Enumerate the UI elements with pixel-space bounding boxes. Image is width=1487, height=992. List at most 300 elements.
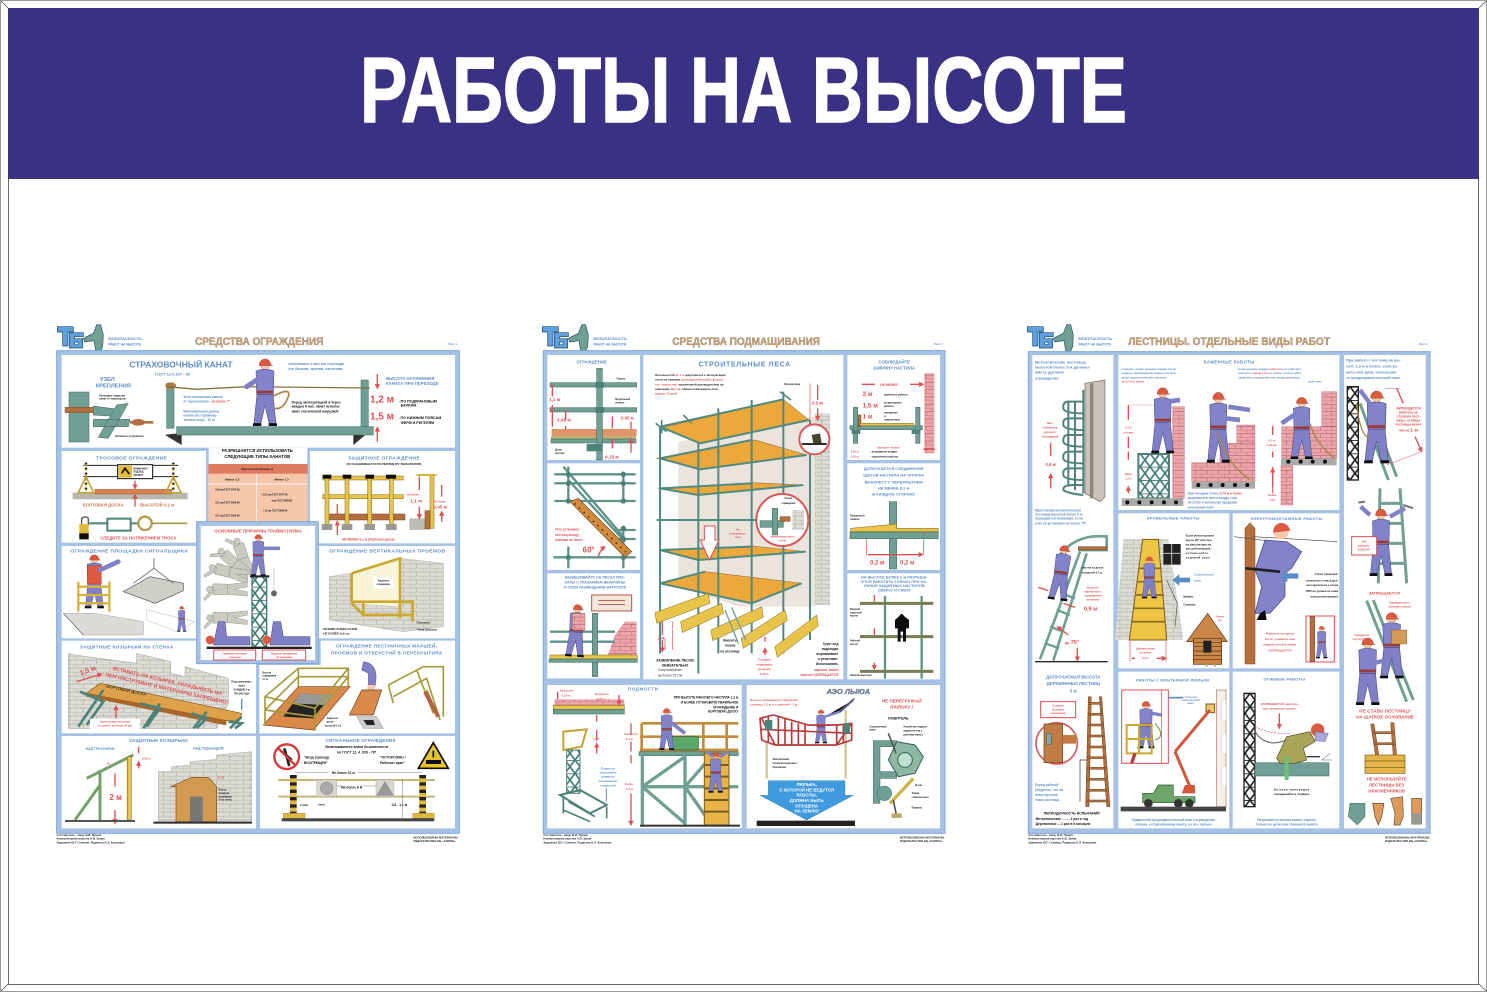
panel: огневые работы [1233,672,1339,828]
panel: ограждение вертикальных проемов: Проушины [417,622,430,624]
panel: строительные леса: не менее [758,667,771,671]
panel: тросовое ограждение: ВЫСОТОЙ 0,1 м [140,503,174,508]
panel: кровельные работы: не рассчитана на [1186,542,1211,546]
panel: страховочный канат [62,355,455,448]
panel: строительные леса: Сопротивление [658,668,682,672]
panel: кровельные работы: используйте [1186,551,1208,555]
inset circles: прикрепление лесов [770,536,795,538]
panel: лестницы левая колонка: ногах прочная [1035,793,1058,797]
wooden ladder [1086,697,1110,807]
panel: электромонтажные работы: Работать на одном [1266,632,1294,636]
panel: электромонтажные работы [1233,513,1339,668]
panel: лестницы левая колонка: 5 м [1070,689,1077,694]
panel: защитные настилы: защитный [850,611,862,614]
panel: подмости: 1,1 м [626,737,633,741]
panel: люльки: Страховочный канат [773,762,798,765]
panel: защитные козырьки на стенах: и стеной - не более 50 мм [98,724,132,728]
panel: правая колонка: ЛЕСТНИЦЫ БЕЗ [1369,782,1405,787]
panel: страховочный канат: каждые 6 мес. канат испыты- [292,405,340,409]
panel: правая колонка: лестницы менее [1395,422,1421,426]
panel: кровельные работы: Верёвка [1183,596,1194,598]
panel: электромонтажные работы: Строп предохра- [1315,572,1338,576]
poster 3 header: Лист 3 [1419,342,1428,346]
panel: сигнальное ограждение: по ГОСТ 12. 4. 026 - 76* [337,750,377,754]
panel: люльки: Пружина [912,807,923,809]
panel: защитное ограждение: 0,45 м [433,505,448,510]
panel: страховочный канат: УЗЕЛ [100,377,115,383]
worker walking on beam [247,359,289,426]
panel: тросовое ограждение: ТРОСОВОЕ ОГРАЖДЕНИЕ [96,455,168,461]
panel: строительные леса: На [736,528,740,532]
aerial lift truck [1143,710,1210,808]
panel: ограждение: Доска [555,450,563,452]
panel: люльки: ЛОВИТЕЛЬ [888,716,909,720]
blue arrow [760,781,853,820]
panel: защитные козырьки: Выход [218,790,227,792]
panel: лестница [547,463,640,570]
icon: warning sign [418,743,448,768]
panel: ограждение лестничных маршей: Закрытая [327,718,338,720]
panel: правая колонка: ступенях лест- [1397,414,1420,418]
panel: защитные козырьки на стенах: БОРТОВАЯ ДОСКА [106,683,148,697]
panel: тросовое ограждение: СЛЕДИТЕ ЗА НАТЯЖЕНИЕМ ТРОСА [100,535,177,540]
panel: плакаты с нагрузками: ВЫВЕШИВАЙТЕ НА ЛЕСАХ ПЛА- [565,575,626,579]
panel: соединение щитов: 0,2 м [870,560,885,566]
panel: типы канатов: l 8,7 мм ГОСТ 3063-80 [215,516,240,518]
panel: типы канатов: РАЗРЕШАЕТСЯ ИСПОЛЬЗОВАТЬ [222,448,293,453]
poster 2 footer: Художник Ю.Г. Голиков. Редактор Н.Э. Кокошкин [543,840,612,844]
panel: правая колонка: НАКОНЕЧНИКОВ [1368,788,1405,793]
panel: каменные работы: 0,7 м [1125,426,1132,430]
panel: лестницы левая колонка: Настил из досок [1082,565,1104,569]
panel: сигнальное ограждение [260,736,455,828]
panel: строительные леса: 2 м [658,635,664,640]
panel: подмости: ПРИ ВЫСОТЕ РАБОЧЕГО НАСТИЛА 1,3 м [674,695,739,699]
panel: каменные работы: Следите, чтобы уровень кладки после [1122,367,1177,371]
panel: подмости: 1,3 м [626,787,633,791]
panel: защитные козырьки на стенах: НЕМ ИНСТРУМЕНТ И МАТЕРИАЛЫ ЗАПРЕЩЕНО! [105,672,229,706]
panel: огневые работы: ОГНЕВЫЕ РАБОТЫ [1263,677,1305,682]
panel: страховочный канат: от горизонтали - не более 7° [183,400,231,404]
panel: лестница: лестниц между [555,533,579,537]
panel: подмости: ОГРАЖДЕНИЕ И [713,705,739,709]
panel: правая колонка: НА ШАТКОЕ ОСНОВАНИЕ [1356,714,1414,719]
poster 3 frame [1028,352,1430,833]
panel: каменные работы: настила и выше 1,3 м от земли, используйте [1238,371,1302,375]
panel: правая колонка: НЕ ИСПОЛЬЗУЙТЕ [1367,777,1407,782]
injured workers [213,622,310,645]
panel: ширина настила [847,355,940,460]
poster 3 footer: Составитель - канд. В.И. Пушин [1028,833,1073,837]
panel: каменные работы: и менее [1266,444,1277,447]
panel: защитные настилы: Рабочий [850,640,860,643]
poster 1 footer: Компьютерная верстка А.В. Зуева [57,836,105,840]
panel: подмости: БОРТОВУЮ ДОСКУ [708,710,738,714]
panel: защитные козырьки на стенах: 1,5 м [79,665,97,677]
panel: страховочный канат: ВЫСОТА НАТЯЖЕНИЯ [386,376,434,381]
panel: правая колонка: работать [1358,544,1370,548]
panel: электромонтажные работы: ЗАПРЕЩАЕТСЯ [1268,649,1292,653]
wooden ladder on crate [1371,723,1397,758]
panel: подмости [547,685,742,828]
panel: каменные работы: При толщине стены 0,75 м и более [1188,491,1242,495]
panel: ограждение площадки сигнальщика: ОГРАЖДЕНИЕ ПЛОЩАДКИ СИГНАЛЬЩИКА [70,549,188,555]
panel: лестницы левая колонка: Стяжные [1052,705,1064,708]
panel: правая колонка: чем на 1 м [1399,428,1418,434]
panel: каменные работы: 0,7 м [1268,438,1275,442]
panel: строительные леса: 4 м - комиссией, назначенной руководителем ор- [655,382,724,386]
panel: лестницы левая колонка: ограждается перилами, если [1035,517,1083,521]
panel: типы канатов: Менее 1,5 [275,477,289,481]
panel: основные причины травматизма: на человека [276,656,293,659]
panel: соединение щитов: элемент [850,519,860,521]
panel: защитные козырьки [62,736,256,828]
panel: плакаты с нагрузками: КАТЫ С УКАЗАНИЕМ ВЕЛИЧИНЫ [565,580,626,584]
panel: защитное ограждение: Не менее [407,492,419,496]
panel: электромонтажные работы: ЛЭП на уровне не ниже [1306,589,1339,593]
poster 3: лестницы, отдельные виды работ [1027,325,1430,844]
panel: кровельные работы: КРОВЕЛЬНЫЕ РАБОТЫ [1147,515,1200,520]
panel: люльки: рабочему канату [903,734,923,736]
panel: ширина настила: 2 м [863,391,873,398]
panel: тросовое ограждение: ВНИМАНИЕ! [133,467,148,470]
panel: защитное ограждение: ЗАЩИТНОЕ ОГРАЖДЕНИЕ [348,455,420,461]
panel: каменные работы [1118,355,1339,510]
panel: типы канатов: Высота натяжения, м [241,467,273,471]
panel: соединение щитов: ДОПУСКАЕТСЯ СОЕДИНЕНИЕ [864,466,924,471]
panel: защитные настилы: ЕТСЯ РАБОТАТЬ ТОЛЬКО ПРИ НА- [861,580,928,584]
panel: защитные козырьки: за пределы [218,796,232,798]
scaffold structure [639,723,740,827]
panel: правая колонка: ТАК [1361,540,1367,544]
panel: лестница: трапами не более [555,538,583,542]
panel: страховочный канат: Угол отклонения каната [183,395,223,399]
I-beam and cage [1063,380,1105,502]
panel: люльки: НЕ ПЕРЕГРУЖАЙ [882,697,922,704]
panel: работы с монтажной люльки: Стальной [1185,696,1197,699]
panel: ограждение: настила [555,453,565,455]
panel: лестницы левая колонка: иметь дуговое [1035,370,1065,375]
poster 2 header [542,325,943,353]
panel: подмости: Подмости [601,766,615,770]
panel: ограждение: ОГРАЖДЕНИЕ [576,359,607,364]
panel: типы канатов: СЛЕДУЮЩИЕ ТИПЫ КАНАТОВ [224,454,290,459]
panel: страховочный канат: точных опор - 12 м [183,418,215,422]
panel: защитные настилы: настил [850,644,859,646]
panel: соединение щитов [847,463,940,570]
panel: типы канатов: или ГОСТ 3069-80 [272,501,293,503]
panel: кровельные работы: канат [1194,580,1202,583]
panel: ограждение лестничных маршей [259,641,455,733]
poster 2: средства подмащивания [542,325,945,844]
ladder with hammer worker [1358,488,1413,583]
panel: подмости: закрепляйте [599,770,617,774]
panel: соединение щитов: В КАЖДУЮ СТОРОНУ [872,492,916,497]
panel: страховочный канат: 1,2 м [370,394,394,405]
panel: плакаты с нагрузками [547,573,640,678]
inset circles: ограждения [781,503,796,505]
panel: люльки: канат [869,730,876,732]
panel: защитные настилы: настил [850,616,859,618]
panel: страховочный канат: Максимальная длина [183,409,219,413]
panel: ограждение: Продольный [615,398,631,401]
panel: страховочный канат: БАЛКАМ [401,404,416,408]
panel: строительные леса: только [725,644,735,648]
panel: лестницы левая колонка: ограждения [1042,435,1059,439]
panel: ширина настила: 0,15 м [851,454,859,458]
panel: ширина настила: 1 м [863,414,873,421]
blue arrow: С КОТОРОЙ НЕ ВЕДУТСЯ [779,787,834,792]
scaffold tubes [657,392,810,673]
panel: лестницы левая колонка: ДЕРЕВЯННЫХ ЛЕСТНИЦ [1047,681,1101,686]
poster 2 footer: ИСПОЛЬЗОВАНЫ МАТЕРИАЛЫ [900,835,945,839]
panel: каменные работы: выше уровня рабочего настила [1122,375,1167,379]
panel: ширина настила: - отделочные работы [870,454,899,458]
title banner [8,8,1479,179]
panel: строительные леса: по лестнице [720,649,740,653]
panel: ограждение лестничных маршей: ПРОЕМОВ И ОТВЕРСТИЙ В ПЕРЕКРЫТИЯХ [331,649,443,656]
panel: типы канатов [208,448,308,523]
panel: ширина настила: - возведение кладки [870,451,897,454]
panel: лестница: Угол установки [555,528,579,532]
panel: основные причины травматизма: с высоты [228,656,242,659]
panel: лестницы левая колонка: тихая лестница [1035,798,1060,802]
poster 3 header [1027,325,1428,353]
panel: правая колонка [1344,355,1426,828]
panel: соединение щитов: Поперечный [850,515,865,518]
panel: люльки: Зажим [912,793,919,795]
ladder tips [1348,797,1422,825]
panel: кровельные работы: ходовой трап [1186,555,1210,559]
panel: подмости: На высоте [624,732,639,736]
panel: страховочный канат: 1,5 м [370,411,394,422]
panel: люльки: АЭО ЛЫЮА [826,687,870,696]
panel: типы канатов: Менее 1,2 [225,477,240,481]
panel: защитные козырьки на стенах: ВСТАВАТЬ НА КОЗЫРЕК, СКЛАДЫВАТЬ НА [112,666,223,697]
panel: соединение щитов: ВНАХЛЕСТ С ПЕРЕКРЫТИЕМ [865,479,923,484]
panel: ограждение вертикальных проемов: РАЗМЕР ЯЧЕЕК СЕТКИ [323,627,357,631]
panel: строительные леса: поперечные [730,532,746,535]
panel: ширина настила: работы [884,404,895,408]
panel: ограждение лестничных маршей: 1,1 м [262,679,268,681]
panel: защитные козырьки на стенах: Зазор между настилом [100,720,130,724]
panel: страховочный канат: натягивают в местах перехода [288,362,345,366]
panel: тросовое ограждение: БОРТОВАЯ ДОСКА [83,503,124,508]
panel: огневые работы: складывайте в порядке [1274,792,1310,796]
panel: строительные леса: подкладок [756,662,773,666]
panel: лестницы левая колонка: Приставная металлическая [1035,508,1081,512]
panel: лестницы левая колонка: соединения [1051,712,1066,715]
panel: люльки: надежной тяги к [903,729,923,732]
panel: лестницы левая колонка: Металлические .........1 раз в год [1036,817,1089,821]
poster 1 frame [57,351,459,833]
poster 3 footer: Компьютерная верстка А.В. Зуева [1028,836,1077,840]
panel: ограждение вертикальных проемов: ограждение [376,584,391,586]
blue arrow: НА ЗЕМЛЮ [795,809,819,814]
panel: работы с монтажной люльки: РАБОТЫ С МОНТАЖНОЙ ЛЮЛЬКИ [1136,677,1209,682]
panel: лестницы левая колонка: элементов [1043,425,1058,429]
panel: строительные леса: Вносить [723,639,737,643]
panel: правая колонка: ОПАСНО! [1358,548,1370,552]
poster 3 footer: ИСПОЛЬЗОВАНЫ МАТЕРИАЛЫ [1385,835,1430,839]
panel: защитные козырьки: 20° [107,761,111,765]
panel: защитные настилы: НА ВЫСОТЕ БОЛЕЕ 6 м РАЗРЕША- [861,576,928,580]
panel: лестницы левая колонка: Деревянные ....1 раз в 6 месяцев [1036,822,1090,826]
panel: соединение щитов: 0,2 м [900,560,915,566]
panel: ограждение вертикальных проемов: Анкер проушины [417,629,437,632]
panel: лестницы левая колонка: Высота [1087,585,1099,589]
cradle [760,715,852,745]
panel: работы с монтажной люльки: страховочный [1182,699,1200,702]
panel: соединение щитов: ЩИТОВ НАСТИЛА НА ОПОРАХ [863,473,924,478]
poster 3 footer: Художник Ю.Г. Голиков. Редактор Н.Э. Кокошкин [1028,840,1097,844]
panel: защитные козырьки на стенах: КАЖДЫЕ 6 м [234,689,250,692]
panel: лестницы левая колонка: 0,8 м [1045,462,1056,467]
panel: люльки: Высота ограждения с наружной [750,698,798,702]
panel: строительные леса: после их приемки руководителем работ, а выше [655,378,724,382]
panel: тросовое ограждение [62,451,206,543]
panel: защитные настилы [847,573,940,679]
panel: каменные работы: защитные ограждения или предохранитель- [1238,375,1301,379]
panel: защитное ограждение: Не более [434,500,446,504]
panel: люльки: ЛЮЛЬКУ ! [890,705,914,710]
panel: правая колонка: Подниматься по [1389,601,1410,604]
icon: no entry sign [274,744,299,769]
building wall [678,413,830,607]
panel: каменные работы: и более [1123,430,1134,434]
panel: лестницы левая колонка: ДОПУСКАЕМАЯ ВЫСОТА [1046,674,1101,679]
panel: сигнальное ограждение: "ОСТОРОЖНО ! [380,756,406,760]
panel: правая колонка: няты обе руки, используй- [1346,370,1398,374]
panel: защитные настилы: СВЕРХУ И СНИЗУ [878,589,912,593]
panel: каменные работы: КАМЕННЫЕ РАБОТЫ [1204,359,1255,364]
panel: ограждение: элемент [615,402,625,404]
poster 3 footer: ИЗДАТЕЛЬСТВО НЦ «СОЛОН» [1385,839,1428,843]
panel: огневые работы: только из цепи или стального каната [1256,822,1318,826]
panel: лестницы левая колонка [1032,355,1113,828]
panel: типы канатов: l 11 мм ГОСТ 3069-80 [263,510,288,512]
panel: ограждение лестничных маршей: Высота [262,672,272,674]
panel: подмости: передвижных [598,779,618,783]
panel: подмости: ПОДМОСТИ [628,687,659,692]
panel: типы канатов: l 8,8 мм ГОСТ 3077-80 [215,490,240,492]
panel: каменные работы: 1,3 м [1269,498,1276,502]
panel: люльки: страховочного [912,797,929,799]
blue arrow: ДОЛЖНА БЫТЬ [790,798,824,803]
poster 2 footer: Составитель - канд. В.И. Пушин [543,833,588,837]
poster 2 footer: ИЗДАТЕЛЬСТВО НЦ «СОЛОН» [900,839,943,843]
poster 1 footer: ИСПОЛЬЗОВАНЫ МАТЕРИАЛЫ [413,835,458,839]
panel: строительные леса: СТРОИТЕЛЬНЫЕ ЛЕСА [698,362,790,369]
panel: электромонтажные работы: когте, упираясь ним [1265,637,1295,641]
panel: страховочный канат: КРЕПЛЕНИЯ [96,384,131,390]
panel: подмости: 1,1 м [592,736,600,740]
panel: огневые работы: Остатки электродов [1274,788,1310,792]
panel: подмости: подмостей [600,783,616,787]
panel: страховочный канат: каната без промежу- [183,414,217,418]
panel: сигнальное ограждение: ВОСПРЕЩЕН" [304,761,328,765]
person silhouette [895,614,909,642]
title banner: РАБОТЫ НА ВЫСОТЕ [360,38,1127,142]
poster 1 header: Лист 1 [448,342,457,346]
inset circles: к стене [778,540,787,542]
panel: люльки: Рабочий канат [773,758,790,761]
panel: ограждение лестничных маршей: ОГРАЖДЕНИЕ ЛЕСТНИЧНЫХ МАРШЕЙ, [336,641,437,648]
panel: строительные леса: выравнивают [816,652,839,656]
panel: люльки: Страховочный [869,725,887,728]
panel: лестницы левая колонка: высотой более 5 м должны [1035,365,1090,370]
panel: кровельные работы: Уклон [1216,614,1224,618]
panel: огневые работы: ЗАПРЕЩАЕТСЯ работать [1261,702,1299,706]
poster 1 footer: ИЗДАТЕЛЬСТВО НЦ «СОЛОН» [413,839,456,843]
panel: лестницы левая колонка: перильного [1084,589,1102,593]
panel: ограждение: Перила [617,378,626,380]
panel: строительные леса: ОБЯЗАТЕЛЬНО [662,664,689,668]
panel: основные причины травматизма: ОСНОВНЫЕ ПРИЧИНЫ ТРАВМАТИЗМА [214,528,303,533]
poster 2 footer: Компьютерная верстка А.В. Зуева [543,836,592,840]
panel: ограждение: 0,45 м [557,418,571,423]
panel: люльки [747,685,940,828]
panel: страховочный канат: - ПО ПОДКРАНОВЫМ [398,399,437,403]
panel: правая колонка: работать на [1399,410,1418,414]
panel: работы с монтажной люльки: канат [1187,702,1195,705]
welder [1277,723,1332,780]
panel: ширина настила: ШИРИНУ НАСТИЛА [874,365,916,370]
panel: кровельные работы: Ширина трапа [1136,646,1155,650]
panel: лестницы левая колонка: толщиной 0,1 м [1082,570,1102,574]
panel: лестницы левая колонка: убедитесь, что на [1035,788,1063,792]
log house [1187,613,1227,667]
panel: строительные леса [643,355,843,679]
panel: ширина настила: 0,05 м [851,450,859,454]
panel: сигнальное ограждение: Не более 12 м [332,771,355,775]
panel: ширина настила: СОБЛЮДАЙТЕ [879,359,910,364]
panel: правая колонка: под лестницей [1353,638,1371,641]
panel: страховочный канат: СТРАХОВОЧНЫЙ КАНАТ [129,361,233,370]
panel: защитные козырьки: НАД ТРОТУАРОМ [86,747,115,751]
panel: ограждение вертикальных проемов: Защитное [378,581,390,583]
panel: основные причины травматизма: Падение человека [223,651,247,655]
panel: тросовое ограждение: ЗАКРЫТ [133,474,144,477]
panel: подмости: 0,15 м [562,694,571,698]
panel: ограждение лестничных маршей: ограждения [262,676,277,678]
panel: основные причины травматизма: Падение предметов [271,651,298,655]
panel: электромонтажные работы: подной ногой в опору, [1263,642,1297,646]
panel: страховочный канат: КАНАТА ПРИ ПЕРЕХОДЕ [386,381,439,386]
panel: лестницы левая колонка: болтовые [1052,708,1065,711]
panel: лестницы левая колонка: Металлические лестницы [1035,359,1087,364]
panel: страховочный канат: вают статической нагрузкой [292,409,338,413]
blue arrow: ЛЮЛЬКА, [796,782,817,787]
panel: строительные леса: Грунт под [823,642,838,646]
panel: сигнальное ограждение: Канат [318,804,326,806]
panel: подмости: Более [625,782,634,786]
poster 1 header: СРЕДСТВА ОГРАЖДЕНИЯ [195,336,323,348]
panel: ограждение [547,355,640,460]
panel: страховочный канат: ГОСТ 12.4.107 - 82 [155,371,191,376]
poster 1 footer: Составитель - канд. В.И. Пушин [57,833,102,837]
blue arrow: ОПУЩЕНА [795,803,819,808]
panel: кровельные работы: Если уклон кровли [1186,534,1214,538]
panel: страховочный канат: ФЕРМ И РИГЕЛЯМ [401,421,434,425]
panel: лестницы левая колонка: Шаг [1047,421,1054,425]
panel: лестницы левая колонка: лестница высотой более 6 м [1035,513,1083,517]
panel: лестницы левая колонка: не менее [1086,597,1100,601]
panel: строительные леса: подкладки [822,647,838,651]
panel: ограждение: 1,1 м [549,397,561,402]
panel: лестницы левая колонка: ограждения [1035,375,1059,380]
poster 2 frame [543,351,945,833]
